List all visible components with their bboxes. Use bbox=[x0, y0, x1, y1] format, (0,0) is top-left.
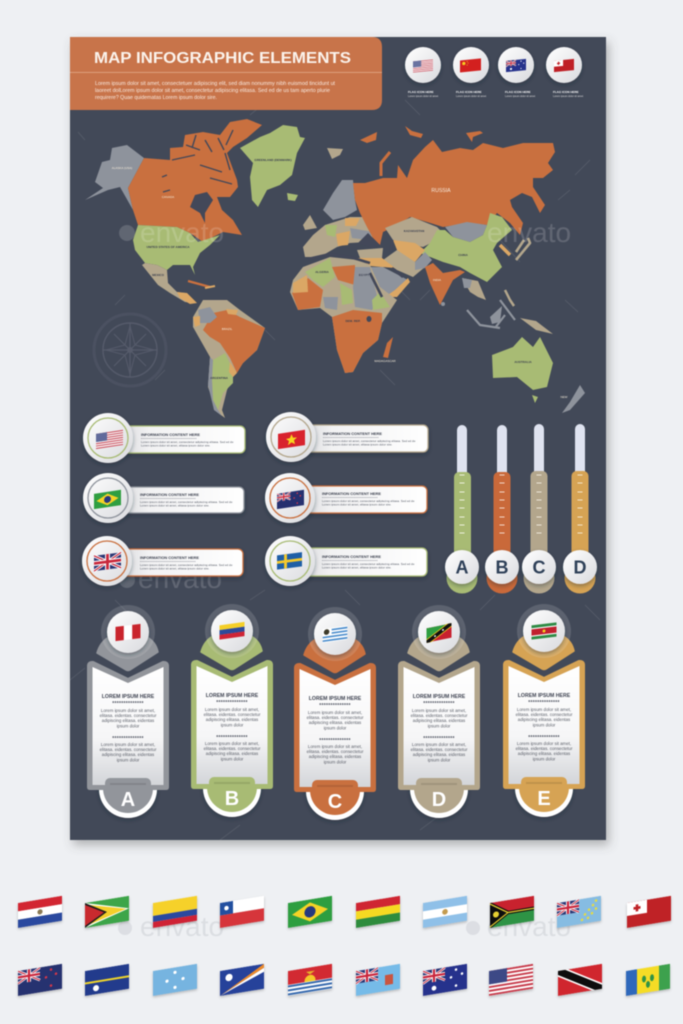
panel E bbox=[504, 604, 584, 817]
panel A bbox=[88, 605, 168, 818]
info bar: Brazil bbox=[83, 473, 244, 523]
panel D: Lorem ipsum dolor sit amet, bbox=[412, 742, 466, 747]
thermometer A: A bbox=[456, 558, 468, 578]
info bar: Vietnam bbox=[266, 412, 428, 462]
watermarks: envato bbox=[140, 911, 224, 942]
panel B: elitasa. eidentas. consectetur bbox=[204, 712, 261, 717]
panel D: adipiscing elitasa. eidentas bbox=[413, 752, 466, 757]
map labels: ARGENTINA bbox=[210, 376, 229, 380]
map: asia bbox=[357, 213, 553, 334]
panel B: adipiscing elitasa. eidentas bbox=[206, 717, 259, 722]
map: south america bbox=[193, 300, 265, 418]
info bar: USA: Lorem ipsum dolor sit amet, elitasa ipsum dolor sire. bbox=[141, 444, 211, 448]
panel D: Lorem ipsum dolor sit amet, bbox=[412, 708, 466, 713]
intro text bbox=[95, 81, 336, 101]
panel B: LOREM IPSUM HERE bbox=[206, 693, 259, 699]
flag collection row 1 bbox=[18, 896, 671, 928]
thermometer chart bbox=[445, 424, 597, 594]
panel E: ipsum dolor bbox=[533, 756, 556, 762]
info bar: Vietnam: Lorem ipsum dolor sit amet, elitasa ipsum dolor sire. bbox=[323, 442, 393, 446]
thermometer C: C bbox=[532, 558, 546, 578]
flag badges row bbox=[405, 47, 583, 98]
panel C: elitasa. eidentas. consectetur bbox=[307, 715, 364, 720]
map labels: CANADA bbox=[162, 195, 174, 199]
panel E: elitasa. eidentas. consectetur bbox=[516, 712, 573, 717]
info bar: New Zealand bbox=[265, 473, 427, 523]
watermarks: envato bbox=[487, 911, 571, 942]
map labels: ALGERIA bbox=[315, 270, 330, 274]
panel A: ipsum dolor bbox=[117, 758, 140, 762]
map labels: DEM. REP. bbox=[346, 319, 361, 323]
badge: China bbox=[453, 47, 489, 98]
info bar: UK: INFORMATION CONTENT HERE bbox=[140, 555, 199, 560]
badge: Tonga bbox=[546, 47, 583, 98]
intro text: Lorem ipsum dolor sit amet, consectetuer adipiscing elit, sed diam nonummy nibh euismod tincidunt ut bbox=[95, 81, 336, 87]
watermarks: envato bbox=[487, 217, 571, 248]
panel C: adipiscing elitasa. eidentas bbox=[309, 720, 362, 725]
map labels: CHINA bbox=[458, 253, 469, 257]
panel A: Lorem ipsum dolor sit amet, bbox=[101, 708, 155, 713]
panel D: D bbox=[432, 789, 446, 811]
badge: Australia: FLAG ICON HERE bbox=[505, 90, 531, 94]
panel E: ipsum dolor bbox=[533, 722, 556, 728]
panel C: Lorem ipsum dolor sit amet, bbox=[308, 744, 362, 749]
header banner bbox=[70, 37, 382, 110]
info bar: Vietnam: INFORMATION CONTENT HERE bbox=[323, 431, 382, 436]
panel C: LOREM IPSUM HERE bbox=[309, 696, 362, 702]
watermarks: envato bbox=[140, 217, 224, 248]
watermark streaks bbox=[70, 96, 600, 840]
info bar: UK: Lorem ipsum dolor sit amet, consectetur adipiscing elitasa. Sed ed de bbox=[140, 563, 233, 567]
badge: Australia: Lorem ipsum dolor sit amet bbox=[505, 95, 535, 98]
map: africa bbox=[290, 254, 403, 373]
map labels: INDIA bbox=[433, 278, 441, 282]
map labels: RUSSIA bbox=[431, 188, 451, 194]
panel E: E bbox=[537, 788, 551, 810]
panel D: ipsum dolor bbox=[428, 758, 451, 762]
info bars bbox=[82, 412, 428, 586]
info bar: Brazil: INFORMATION CONTENT HERE bbox=[140, 492, 199, 497]
badge: Australia bbox=[498, 47, 535, 98]
panel D: ************** bbox=[423, 736, 455, 742]
panel C: ************** bbox=[319, 703, 351, 709]
panel C: ************** bbox=[319, 738, 351, 744]
badge: USA bbox=[405, 47, 441, 98]
badge: USA: Lorem ipsum dolor sit amet bbox=[408, 95, 438, 98]
title: MAP INFOGRAPHIC ELEMENTS bbox=[94, 50, 351, 67]
info bar: Brazil: Lorem ipsum dolor sit amet, consectetur adipiscing elitasa. Sed ed de bbox=[140, 500, 233, 504]
map labels: UNITED STATES OF AMERICA bbox=[146, 245, 190, 249]
panel B: ************** bbox=[216, 700, 248, 706]
flag collection row 2 bbox=[18, 964, 670, 996]
panel A: Lorem ipsum dolor sit amet, bbox=[101, 742, 155, 747]
map labels: MEXICO bbox=[152, 273, 165, 277]
panel A: elitasa. eidentas. consectetur bbox=[100, 747, 157, 752]
panel C: ipsum dolor bbox=[324, 760, 347, 764]
info bar: UK: Lorem ipsum dolor sit amet, elitasa ipsum dolor sire. bbox=[140, 566, 210, 570]
panel B: ipsum dolor bbox=[221, 756, 244, 762]
badge: USA: FLAG ICON HERE bbox=[408, 90, 434, 94]
info bar: New Zealand: Lorem ipsum dolor sit amet, elitasa ipsum dolor sire. bbox=[322, 502, 392, 506]
intro text: requirere? Quae quidematas Lorem ipsum dolor sire. bbox=[95, 95, 217, 101]
badge: China: Lorem ipsum dolor sit amet bbox=[456, 95, 486, 98]
panel D: elitasa. eidentas. consectetur bbox=[411, 747, 468, 752]
panel C bbox=[296, 607, 374, 820]
intro text: laoreet dolLorem ipsum dolor sit amet, consectetur adipiscing elitasa. Sed ed de us tam aperto plurie bbox=[95, 88, 330, 94]
panel B: adipiscing elitasa. eidentas bbox=[206, 751, 259, 756]
panel D: adipiscing elitasa. eidentas bbox=[413, 718, 466, 723]
info bar: Sweden: Lorem ipsum dolor sit amet, elitasa ipsum dolor sire. bbox=[322, 566, 392, 570]
panel D: elitasa. eidentas. consectetur bbox=[411, 713, 468, 718]
info bar: Sweden bbox=[265, 536, 427, 586]
thermometer A bbox=[445, 425, 479, 594]
panel D bbox=[400, 605, 478, 818]
thermometer C bbox=[522, 424, 556, 594]
panel A: LOREM IPSUM HERE bbox=[102, 694, 155, 700]
map labels: GREENLAND (DENMARK) bbox=[254, 158, 292, 162]
panel A: A bbox=[121, 789, 135, 811]
panel E: ************** bbox=[528, 735, 560, 741]
panel D: LOREM IPSUM HERE bbox=[413, 694, 466, 700]
panel E: Lorem ipsum dolor sit amet, bbox=[517, 741, 571, 746]
panel E: ************** bbox=[528, 700, 560, 706]
thermometer B: B bbox=[496, 558, 508, 578]
watermarks bbox=[118, 217, 571, 942]
panel B: ************** bbox=[216, 735, 248, 741]
icon: compass bbox=[94, 314, 166, 386]
info bar: USA: INFORMATION CONTENT HERE bbox=[141, 432, 200, 437]
panel A: ipsum dolor bbox=[117, 724, 140, 728]
badge: China: FLAG ICON HERE bbox=[456, 90, 482, 94]
panel C: elitasa. eidentas. consectetur bbox=[307, 749, 364, 754]
info bar: Vietnam: Lorem ipsum dolor sit amet, consectetur adipiscing elitasa. Sed ed de bbox=[323, 439, 416, 443]
badge: Tonga: Lorem ipsum dolor sit amet bbox=[553, 95, 583, 98]
map labels: ALASKA (USA) bbox=[112, 166, 132, 170]
info bar: USA bbox=[83, 413, 245, 463]
map labels: KAZAKHSTAN bbox=[404, 229, 424, 233]
panel C: ipsum dolor bbox=[324, 726, 347, 730]
map: europe bbox=[303, 132, 377, 257]
info bar: Sweden: Lorem ipsum dolor sit amet, consectetur adipiscing elitasa. Sed ed de bbox=[322, 562, 415, 566]
panel A: adipiscing elitasa. eidentas bbox=[102, 752, 155, 757]
map labels: EGYPT bbox=[359, 273, 369, 277]
panel E: LOREM IPSUM HERE bbox=[518, 693, 571, 699]
option panels bbox=[88, 604, 584, 820]
panel E: Lorem ipsum dolor sit amet, bbox=[517, 707, 571, 712]
panel A: ************** bbox=[112, 736, 144, 742]
watermarks: envato bbox=[138, 563, 222, 594]
panel B: Lorem ipsum dolor sit amet, bbox=[205, 741, 259, 746]
panel C: Lorem ipsum dolor sit amet, bbox=[308, 710, 362, 715]
panel A: ************** bbox=[112, 701, 144, 707]
map: north america bbox=[85, 119, 305, 304]
map labels: AUSTRALIA bbox=[514, 360, 532, 364]
panel B: elitasa. eidentas. consectetur bbox=[204, 746, 261, 751]
poster card bbox=[70, 37, 606, 840]
info bar: New Zealand: INFORMATION CONTENT HERE bbox=[322, 491, 381, 496]
map labels: MADAGASCAR bbox=[374, 359, 396, 363]
panel A: elitasa. eidentas. consectetur bbox=[100, 713, 157, 718]
panel D: ipsum dolor bbox=[428, 724, 451, 728]
info bar: UK bbox=[82, 536, 243, 586]
panel B bbox=[192, 604, 272, 817]
panel C: C bbox=[328, 791, 342, 813]
world map bbox=[85, 119, 585, 418]
info bar: New Zealand: Lorem ipsum dolor sit amet, consectetur adipiscing elitasa. Sed ed de bbox=[322, 499, 415, 503]
panel B: B bbox=[225, 788, 239, 810]
panel E: elitasa. eidentas. consectetur bbox=[516, 746, 573, 751]
panel A: adipiscing elitasa. eidentas bbox=[102, 718, 155, 723]
info bar: Sweden: INFORMATION CONTENT HERE bbox=[322, 554, 381, 559]
panel B: Lorem ipsum dolor sit amet, bbox=[205, 707, 259, 712]
badge: Tonga: FLAG ICON HERE bbox=[553, 90, 579, 94]
info bar: USA: Lorem ipsum dolor sit amet, consectetur adipiscing elitasa. Sed ed de bbox=[141, 440, 234, 444]
map labels: BRAZIL bbox=[222, 327, 233, 331]
panel E: adipiscing elitasa. eidentas bbox=[518, 717, 571, 722]
panel B: ipsum dolor bbox=[221, 722, 244, 728]
map labels: NEW bbox=[560, 395, 568, 399]
thermometer D: D bbox=[574, 558, 586, 578]
map labels bbox=[112, 158, 568, 399]
panel C: adipiscing elitasa. eidentas bbox=[309, 754, 362, 759]
thermometer D bbox=[563, 424, 597, 594]
panel E: adipiscing elitasa. eidentas bbox=[518, 751, 571, 756]
map: oceania bbox=[492, 337, 585, 413]
info bar: Brazil: Lorem ipsum dolor sit amet, elitasa ipsum dolor sire. bbox=[140, 504, 210, 508]
map: russia bbox=[353, 126, 555, 245]
thermometer B bbox=[485, 425, 519, 594]
panel D: ************** bbox=[423, 701, 455, 707]
